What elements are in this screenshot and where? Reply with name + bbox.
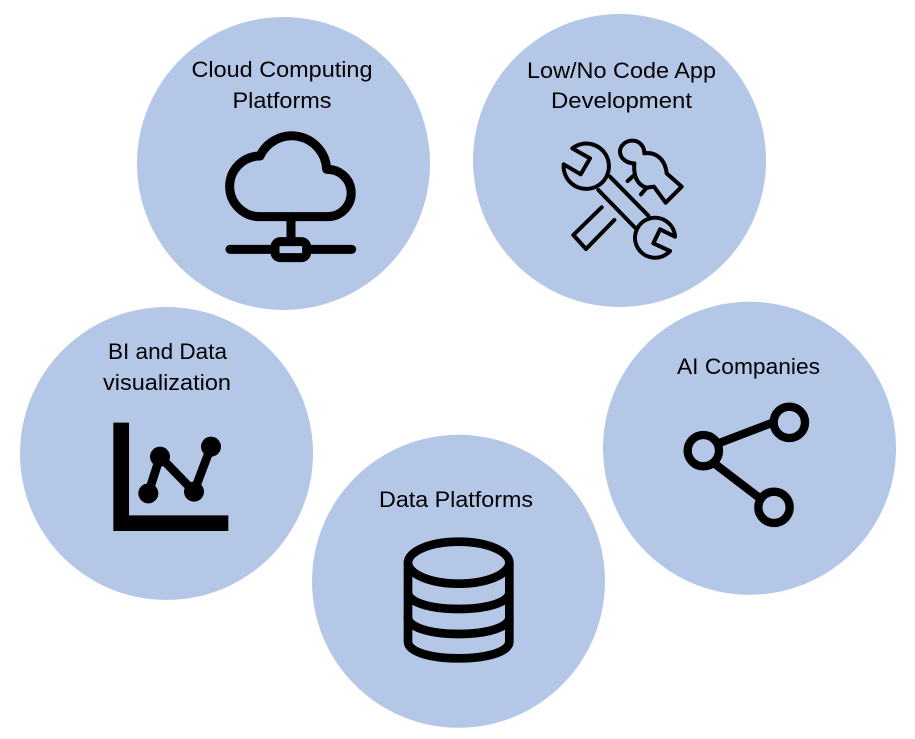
panel: low/no code app development	[473, 14, 766, 307]
heading: BI and data visualization: visualization	[103, 370, 231, 395]
circle: AI companies	[603, 302, 896, 595]
panel: BI and data visualization	[20, 307, 313, 600]
heading: BI and data visualization: BI and Data	[108, 339, 227, 364]
panel: cloud computing platforms	[137, 17, 430, 310]
heading: data platforms: Data Platforms	[379, 487, 533, 512]
heading: low/no code app development: Development	[551, 88, 693, 113]
circle: cloud computing	[137, 17, 430, 310]
icon: cloud network	[230, 136, 352, 258]
icon: database	[408, 542, 509, 658]
circle: low/no code	[473, 14, 766, 307]
heading: cloud computing platforms: Platforms	[232, 88, 332, 113]
panel: AI companies	[603, 302, 896, 595]
circle: BI	[20, 307, 313, 600]
heading: cloud computing platforms: Cloud Computing	[192, 57, 372, 82]
heading: AI companies: AI Companies	[677, 354, 820, 379]
heading: cloud computing platforms	[192, 57, 372, 113]
circle: data platforms	[312, 435, 605, 728]
icon: share nodes	[688, 407, 805, 523]
heading: low/no code app development: Low/No Code App	[527, 58, 716, 83]
icon: line chart	[113, 423, 228, 531]
panel: data platforms	[312, 435, 605, 728]
icon: crossed tools	[564, 141, 682, 258]
heading: BI and data visualization	[103, 339, 231, 395]
heading: low/no code app development	[527, 58, 716, 113]
